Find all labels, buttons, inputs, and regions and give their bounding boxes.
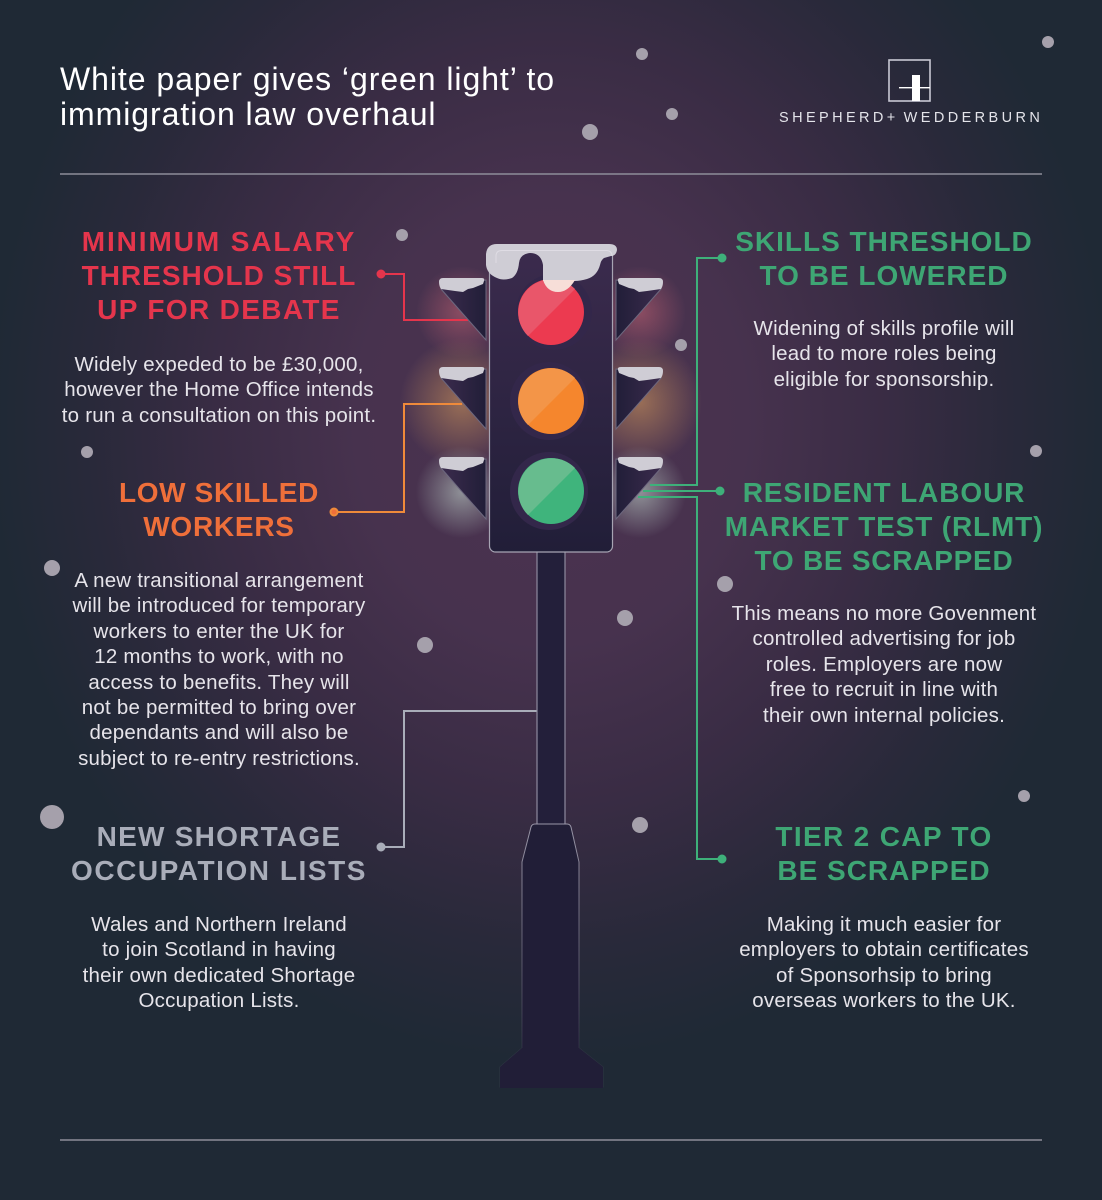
heading: tier 2 cap [775,821,993,886]
text: RLMT [732,602,1036,727]
connector: tier 2 cap [638,497,726,862]
amber lamp [518,368,584,434]
heading: minimum salary: MINIMUM SALARY [82,226,356,257]
connector: shortage lists [378,711,537,850]
housing top edge on snow [496,250,612,263]
text: low skilled: dependants and will also be [90,721,348,744]
text: skills threshold: Widening of skills profile will [754,317,1014,340]
heading: RLMT [725,477,1043,576]
left visor snow [439,278,484,471]
heading: skills threshold: TO BE LOWERED [760,260,1008,291]
text: low skilled: 12 months to work, with no [94,645,344,668]
heading: skills threshold: SKILLS THRESHOLD [735,226,1033,257]
text: tier 2 cap: employers to obtain certificates [739,938,1029,961]
right visor snow [618,278,663,471]
text: minimum salary: however the Home Office intends [64,378,374,401]
text: tier 2 cap: overseas workers to the UK. [752,989,1016,1012]
text: RLMT: roles. Employers are now [766,653,1002,676]
heading: shortage lists: OCCUPATION LISTS [71,855,367,886]
text: low skilled: A new transitional arrangement [74,569,364,592]
text: shortage lists [82,913,355,1012]
base [500,824,603,1087]
text: tier 2 cap: Making it much easier for [767,913,1001,936]
heading: tier 2 cap: BE SCRAPPED [777,855,991,886]
snow on housing [486,244,617,281]
decorative dots [40,36,1054,833]
green lamp [518,458,584,524]
connector: minimum salary [378,270,468,320]
text: low skilled: will be introduced for temporary [72,594,366,617]
text: low skilled: access to benefits. They will [88,671,350,694]
title: White paper gives ‘green light’ to [60,61,555,97]
text: tier 2 cap [739,913,1029,1012]
heading: low skilled: WORKERS [143,511,295,542]
heading: minimum salary: UP FOR DEBATE [97,294,341,325]
text: shortage lists: to join Scotland in having [102,938,336,961]
title: immigration law overhaul [60,96,436,132]
text: shortage lists: Wales and Northern Ireland [91,913,347,936]
text: RLMT: This means no more Govenment [732,602,1036,625]
heading: minimum salary [82,226,356,325]
connector: low skilled [330,404,462,516]
snow highlight [543,280,575,292]
pole [537,550,565,826]
text: skills threshold: lead to more roles being [771,342,997,365]
left visors [441,280,486,519]
traffic light glow [400,266,702,538]
red lamp [518,279,584,345]
heading: low skilled [119,477,319,542]
logo [779,59,1043,126]
heading: tier 2 cap: TIER 2 CAP TO [775,821,993,852]
heading: RLMT: RESIDENT LABOUR [743,477,1025,508]
text: low skilled: not be permitted to bring over [82,696,356,719]
text: minimum salary: Widely expeded to be £30,000, [74,353,364,376]
traffic light [439,244,663,1088]
text: shortage lists: their own dedicated Shortage [83,964,355,987]
heading: skills threshold [735,226,1033,291]
text: skills threshold [754,317,1014,391]
dividers [60,174,1042,1140]
heading: shortage lists: NEW SHORTAGE [97,821,341,852]
title [60,61,555,132]
text: low skilled: workers to enter the UK for [94,620,344,643]
text: RLMT: controlled advertising for job [752,627,1016,650]
lamp recesses [510,274,592,530]
connector: RLMT [643,488,724,494]
connector: skills threshold [650,254,726,485]
heading: RLMT: MARKET TEST (RLMT) [725,511,1043,542]
heading: RLMT: TO BE SCRAPPED [755,545,1013,576]
heading: minimum salary: THRESHOLD STILL [82,260,356,291]
text: RLMT: their own internal policies. [763,704,1005,727]
text: shortage lists: Occupation Lists. [138,989,299,1012]
text: minimum salary [62,353,376,427]
housing [490,250,612,552]
logo wordmark: SHEPHERD+ WEDDERBURN [779,110,1043,126]
heading: shortage lists [71,821,367,886]
heading: low skilled: LOW SKILLED [119,477,319,508]
text: minimum salary: to run a consultation on this point. [62,404,376,427]
right visors [616,280,661,519]
text: skills threshold: eligible for sponsorship. [774,368,994,391]
logo mark [888,59,931,102]
text: tier 2 cap: of Sponsorhsip to bring [776,964,992,987]
text: low skilled [72,569,366,770]
text: low skilled: subject to re-entry restrictions. [78,747,360,770]
text: RLMT: free to recruit in line with [770,678,998,701]
